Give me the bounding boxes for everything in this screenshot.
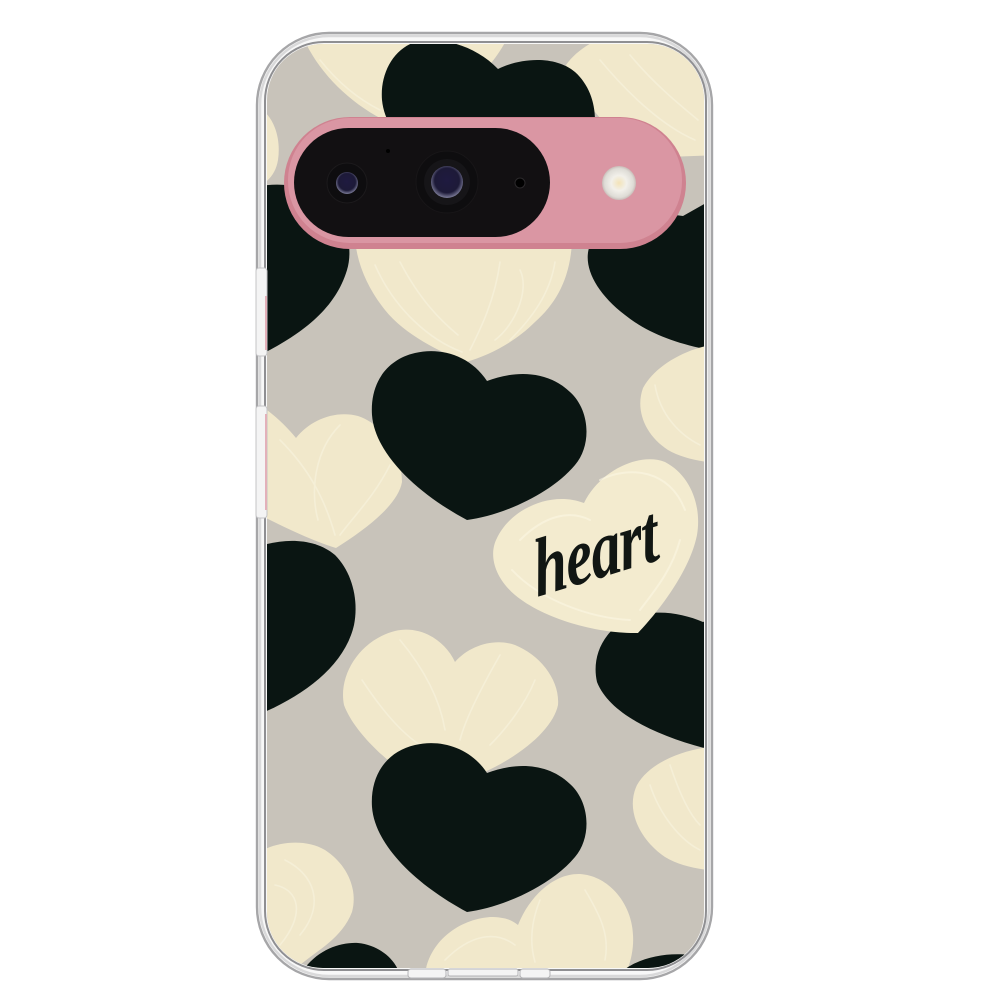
large lens [416,151,478,213]
black heart: bottom right [626,954,685,968]
black heart: left upper [260,185,349,355]
black heart: lower centre [372,743,586,912]
camera bar [284,117,686,249]
flash [602,166,636,200]
side buttons [256,268,267,518]
cream heart: top centre [356,249,572,362]
cream sliver: upper left edge [267,114,279,181]
cream heart: right lower [632,748,704,870]
clear case frame [257,33,712,979]
lens window [294,128,550,237]
small lens [327,163,367,203]
cream heart: top left [308,44,504,117]
cream heart: bottom left [267,842,354,964]
black heart: right upper [588,204,704,348]
brush texture on cream hearts [280,55,700,745]
bottom port cut-outs [408,969,550,978]
cream heart: left middle [260,405,402,548]
black heart: top centre [382,44,595,117]
phone case illustration [256,32,714,980]
cream heart with lettering [493,459,698,633]
cream heart: right middle [640,346,704,462]
microphone dot [386,149,390,153]
printed back panel [260,30,720,975]
cream heart: bottom centre [343,630,558,772]
black heart: right lower [596,612,704,748]
cream heart: bottom centre edge [425,874,633,975]
cream heart: top right [566,44,704,156]
black heart: bottom left [306,942,398,968]
black heart: centre [372,351,586,520]
sensor [515,178,525,188]
black heart: left lower [260,541,356,714]
brush texture on lower hearts [275,765,700,962]
lettering: heart: heart [528,487,664,615]
